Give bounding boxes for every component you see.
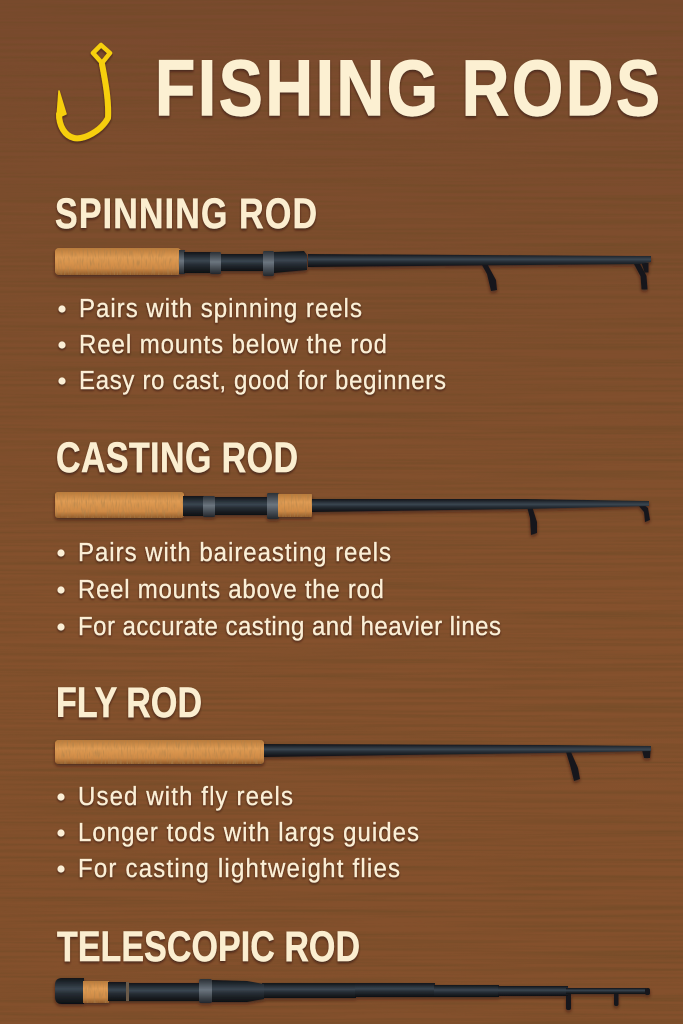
bullet list: fly rod: Used with fly reels [78,782,293,811]
rod: spinning rod [55,248,651,291]
icon: fishing hook [57,45,110,138]
panel: casting rod [55,434,650,641]
panel: telescopic rod [55,923,650,1010]
panel: fly rod [55,679,651,883]
bullet list: casting rod: For accurate casting and heavier lines [78,612,501,641]
bullet list: spinning rod [58,294,446,395]
rod: telescopic rod [55,978,650,1010]
bullet list: spinning rod: Reel mounts below the rod [79,330,387,359]
heading: telescopic rod: TELESCOPIC ROD [57,923,360,971]
bullet list: casting rod: Pairs with baireasting reels [78,538,391,567]
bullet list: spinning rod: Pairs with spinning reels [79,294,362,323]
heading: fly rod: FLY ROD [56,679,202,727]
bullet list: fly rod: For casting lightweight flies [78,854,400,883]
panel: spinning rod [55,190,651,395]
heading: casting rod: CASTING ROD [56,434,298,482]
rod: casting rod [55,492,650,535]
bullet list: casting rod [57,538,501,641]
bullet list: fly rod [57,782,419,883]
bullet list: casting rod: Reel mounts above the rod [78,575,384,604]
rod: fly rod [55,740,651,781]
bullet list: fly rod: Longer tods with largs guides [78,818,419,847]
bullet list: spinning rod: Easy ro cast, good for beginners [79,366,446,395]
heading: spinning rod: SPINNING ROD [55,190,317,238]
title: FISHING RODS [155,44,660,132]
